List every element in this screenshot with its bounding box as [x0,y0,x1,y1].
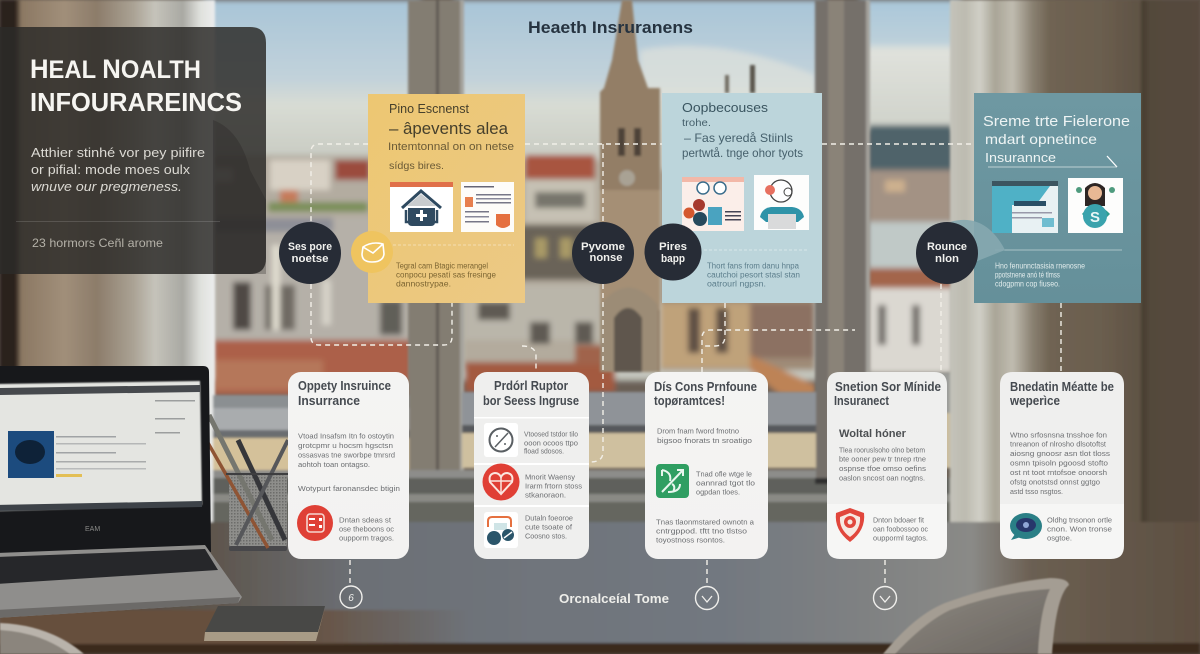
card 5 body: tnreanon of nlrosho dlsotoftst [1010,440,1107,448]
laptop [0,366,242,618]
heart text: stkanoraon. [525,490,566,500]
pills text: Dutaln foeoroe [525,514,573,522]
chair left [0,623,84,654]
card 5 heading [1009,380,1114,408]
panel heading [682,100,803,160]
card 1 icon text: Dntan sdeas st [339,516,392,524]
pills text: Coosno stos. [525,532,567,540]
card 1 icon text: ose theboons oc [339,524,394,534]
card 1 heading: Insurrance [298,394,360,408]
card 3 [645,372,768,559]
card 3 heading [654,380,757,408]
card 1 body: grotcpmr u hocsm hgsctsn [298,441,393,450]
right pane [868,125,953,170]
card 3 outro: toyostnoss rsontos. [656,536,725,544]
card 4 heading: Insuranect [834,394,890,408]
node: Pires bapp [644,224,702,280]
card 4 subheading: Woltal hóner [839,428,907,440]
card 1 body [298,432,400,493]
gauge text: ooon ocoos ttpo [524,438,578,448]
green arrows text [696,470,755,496]
icon: circle number under card 1 [340,586,362,608]
node: Pyvome nonse: Pyvome [581,241,625,253]
icon: clinic house [390,182,453,232]
card 3 intro: bigsoo fnorats tn sroatigo [657,436,752,445]
caption: Orcnalceíal Tome [559,592,669,606]
card 3 heading: Dís Cons Prnfoune [654,380,757,394]
card 4 body: bte ooner pew tr tnrep rtne [839,454,926,464]
card 5 icon text [1047,516,1112,542]
panel heading: sídgs bires. [389,160,444,172]
description [31,145,205,194]
node: Rounce nlon [916,222,978,284]
icon: woman with coin: S [1090,209,1100,226]
card 5 icon text: osgtoe. [1047,534,1072,542]
heading: HEAL NOALTH [30,54,201,84]
card 3 intro [657,426,752,445]
panel heading: Intemtonnal on on netse [388,141,514,153]
left pane city [213,155,413,220]
card 4 heading [834,380,941,408]
icon: people card [682,177,744,231]
tower [600,0,660,372]
panel body [995,262,1085,288]
node: Pyvome nonse [572,222,634,284]
notebook on desk [204,606,325,641]
icon: check circle under card 4 [874,586,896,610]
panel body [707,262,800,288]
heading [30,54,242,117]
panel body: ppotstnene anó té tlmss [995,270,1060,280]
card 2 heading: Prdórl Ruptor [494,379,568,393]
icon: red form badge [297,505,333,541]
panel body: oatrourl ngpsn. [707,280,766,288]
icon: gauge [484,423,518,457]
card 4 body [839,446,926,482]
card 5 body: osmn tpisoln pgoosd stofto [1010,458,1108,468]
card 1 icon text: oupporm tragos. [339,534,394,542]
heart text: Irarm frtorn stoss [525,482,582,490]
card 5 body: ofstg onotstsd onnst ggtgo [1010,478,1100,486]
node: Pires bapp: Pires [659,241,687,253]
panel: light blue [662,93,822,303]
card 2 heading [483,379,579,408]
panel body: dannostrypae. [396,280,451,288]
panel heading [388,102,514,172]
green arrows text: ogpdan tloes. [696,488,740,496]
panel heading: Sreme trte Fielerone [983,113,1130,130]
right curtain and wall [950,0,1200,530]
icon: circle number under card 1: 6 [348,593,354,604]
heart text: Mnorit Waensy [525,472,575,482]
centre pane city [462,160,602,370]
panel heading: Oopbecouses [682,100,769,115]
card 2 heading: bor Seess Ingruse [483,394,579,408]
card 5 body [1010,430,1110,496]
icon: red shield [836,508,864,542]
icon: yellow envelope badge [351,231,393,273]
node: Ses pore noetse: Ses pore [288,241,332,253]
pills text: cute tsoate of [525,522,573,532]
card 1 [288,372,409,559]
card 1 heading: Oppety Insruince [298,379,391,393]
panel heading: Pino Escnenst [389,102,470,116]
card 3 heading: topøramtces! [654,394,725,408]
node: Pyvome nonse: nonse [590,252,622,264]
description: wnuve our pregmeness. [31,179,182,194]
node: Rounce nlon: nlon [935,253,959,265]
pencil holder [208,415,288,551]
panel: dark intro [0,27,266,274]
card 4 heading: Snetion Sor Mínide [835,380,941,394]
panel body: conpocu pesatí sas fresinge [396,270,496,280]
card 4 icon text [873,516,928,542]
dashed connectors [311,144,1061,585]
description: Atthier stinhé vor pey piifire [31,145,205,160]
icon: check circle under card 3 [696,586,718,610]
panel body: Thort fans from danu hnpa [707,262,800,270]
wedge behind Rounce node [950,220,1005,262]
panel heading: – Fas yeredå Stiinls [684,131,793,145]
panel heading [983,113,1130,165]
card 3 outro: cntrgppod. tftt tno tlstso [656,526,747,536]
green arrows text: oannrad tgot tlo [696,478,755,488]
green arrows text: Tnad ofle wtge le [696,470,752,478]
laptop: EAM [85,526,100,533]
desk [0,522,1200,647]
card 4 body: Tlea rooruslsoho olno betom [839,446,925,454]
icon: heart badge [482,464,520,500]
node: Ses pore noetse: noetse [292,253,328,265]
node: Ses pore noetse [279,222,341,284]
panel heading: – âpevents alea [389,120,509,138]
pills text [525,514,573,540]
icon: person at laptop [754,175,809,230]
icon: web page [992,181,1058,233]
icon: speech bubble [1010,513,1042,540]
card 3 outro: Tnas tlaonmstared ownotn a [656,518,755,526]
card 5 heading: Bnedatin Méatte be [1010,380,1114,394]
icon: green arrows [656,464,689,498]
card 5 heading: weperìce [1009,394,1060,408]
lower frame [213,395,409,408]
gauge text: fload sdosos. [524,446,564,456]
panel: yellow [368,94,525,303]
panel body: cautchoi pesort stasl stan [707,270,800,280]
card 5 body: Wtno srfosnsna tnsshoe fon [1010,430,1107,440]
card 1 icon text [339,516,394,542]
card 4 icon text: Dnton bdoaer fit [873,516,925,524]
panel body: Tegral cam Btagic merangel [396,262,488,270]
card 2 [474,372,589,559]
icon: document [461,182,514,232]
card 1 body: Wotypurt faronansdec btigin [298,484,400,493]
panel heading: mdart opnetince [985,131,1097,147]
window frames [408,0,462,495]
heading: INFOURAREINCS [30,87,242,117]
card 5 body: astd tsso nsgtos. [1010,487,1063,496]
node: Rounce nlon: Rounce [927,241,967,253]
card 1 body: ossasvas tne sworbpe tmrsrd [298,450,395,460]
card 5 body: ost nt toot rntofsoe onoorsh [1010,468,1107,477]
card 4 icon text: oupporml tagtos. [873,534,928,542]
panel body [396,262,496,288]
node: Pires bapp: bapp [661,253,685,265]
card 3 outro [656,518,755,544]
card 5 icon text: cnon. Won tronse [1047,524,1112,534]
panel body: Hno fenunnctasisia rnenosne [995,262,1085,270]
gauge text: Vtoosed tstdor tilo [524,430,578,438]
card 4 body: ospnse tfoe omso oefins [839,464,926,473]
gauge text [524,430,578,456]
card 3 intro: Drom fnam fword fmotno [657,426,739,436]
card 5 icon text: Oldhg tnsonon ortle [1047,516,1112,524]
panel heading: trohe. [682,117,711,129]
heart text [525,472,582,500]
card 1 heading [298,379,391,408]
icon: pills [484,512,518,548]
panel body: cdogpmn cop fiuseo. [995,280,1060,288]
footnote: 23 hormors Ceñl arome [32,236,163,250]
card 4 body: oaslon sncost oan nogtns. [839,474,925,482]
card 1 body: Vtoad Insafsm Itn fo ostoytin [298,432,394,440]
panel heading: Insurannce [985,150,1056,165]
description: or pifial: mode moes oulx [31,162,191,177]
dividers inside upper panels [393,245,808,250]
card 5 body: aiosng gnoosr asn tlot tloss [1010,449,1110,458]
card 1 body: aohtoh toan ontagso. [298,460,370,469]
panel heading: pertwtå. tnge ohor tyots [682,146,803,160]
left curtain [0,0,215,525]
title: Heaeth Insruranens [528,19,693,37]
card 4 [827,372,947,559]
panel: teal [974,93,1141,303]
card 5 [1000,372,1124,559]
icon: woman with coin [1068,178,1123,233]
chair right [883,578,1069,654]
card 4 icon text: oan foobossoo oc [873,524,928,534]
